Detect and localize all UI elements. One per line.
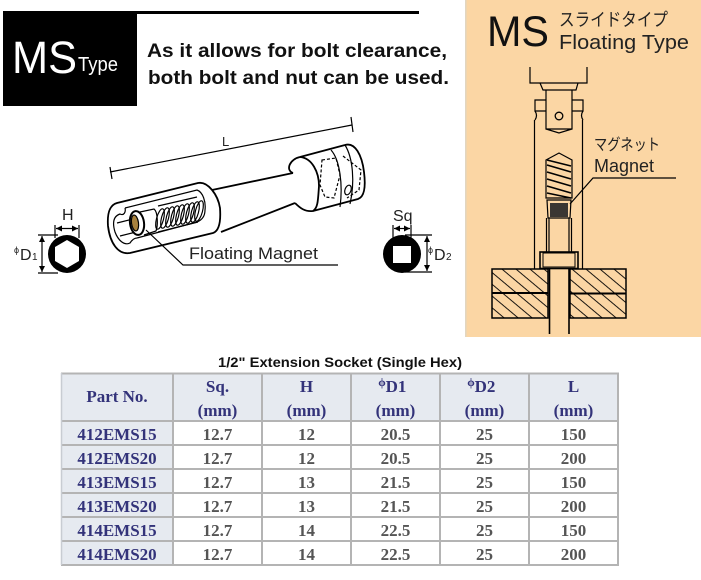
- table header row: H: [300, 377, 313, 396]
- specification table: [61, 373, 619, 565]
- diagram: hex end view with H and D1: ϕ: [14, 245, 19, 255]
- table header row: (mm): [465, 401, 504, 420]
- row 413EMS20: [77, 497, 586, 516]
- diagram: square end view with Sq and D2: D: [434, 247, 446, 264]
- row 412EMS20: 12.7: [203, 449, 233, 468]
- table header row: [86, 375, 593, 420]
- table header row: (mm): [287, 401, 326, 420]
- row 412EMS20: 412EMS20: [77, 449, 157, 468]
- diagram: socket with floating magnet: [108, 117, 365, 265]
- diagram: hex end view with H and D1: [14, 207, 86, 273]
- table title: 1/2" Extension Socket (Single Hex): [218, 354, 462, 370]
- row 414EMS15: 22.5: [381, 521, 410, 540]
- table header row: (mm): [376, 401, 415, 420]
- label: Floating Magnet: [146, 230, 338, 265]
- panel heading: [487, 8, 689, 56]
- table header row: (mm): [554, 401, 593, 420]
- row 412EMS15: 12.7: [203, 425, 233, 444]
- row 413EMS15: 12.7: [203, 473, 233, 492]
- description text: both bolt and nut can be used.: [148, 67, 449, 89]
- bolted plates: [492, 269, 626, 318]
- diagram: square end view with Sq and D2: 2: [446, 252, 452, 263]
- row 412EMS20: 25: [476, 449, 493, 468]
- diagram: hex end view with H and D1: 1: [32, 252, 38, 263]
- row 414EMS20: 414EMS20: [77, 545, 157, 564]
- magnet block: [547, 200, 571, 218]
- row 413EMS20: 13: [298, 497, 315, 516]
- floating magnet: [128, 209, 157, 236]
- description text: As it allows for bolt clearance,: [147, 40, 447, 62]
- row 414EMS20: 12.7: [203, 545, 233, 564]
- table header row: ϕ: [467, 375, 475, 389]
- row 413EMS15: 13: [298, 473, 315, 492]
- row 414EMS15: 14: [298, 521, 316, 540]
- row 414EMS15: 150: [561, 521, 586, 540]
- table header row: Part No.: [86, 387, 148, 406]
- row 413EMS20: 200: [561, 497, 586, 516]
- shaft: [212, 173, 295, 232]
- panel heading: Floating Type: [559, 32, 689, 54]
- row 414EMS15: 25: [476, 521, 493, 540]
- row 414EMS15: [77, 521, 586, 540]
- row 414EMS20: 14: [298, 545, 316, 564]
- spring: [154, 200, 205, 230]
- table header row: (mm): [198, 401, 237, 420]
- row 413EMS20: 413EMS20: [77, 497, 157, 516]
- drive and collar: [530, 67, 587, 269]
- row 413EMS15: [77, 473, 586, 492]
- panel heading: スライドタイプ: [559, 10, 668, 30]
- row 412EMS15: 20.5: [381, 425, 410, 444]
- table header row: D1: [386, 377, 406, 396]
- diagram: square end view with Sq and D2: Sq: [393, 208, 413, 225]
- table header row: L: [568, 377, 579, 396]
- row 414EMS20: 200: [561, 545, 586, 564]
- row 412EMS15: [77, 425, 586, 444]
- label: magnet: マグネット: [594, 136, 660, 154]
- row 413EMS20: 25: [476, 497, 493, 516]
- slotted sleeve: [108, 183, 220, 253]
- row 414EMS20: [77, 545, 586, 564]
- header banner: MS Type: Type: [78, 54, 118, 76]
- diagram: hex end view with H and D1: D: [20, 247, 32, 264]
- row 413EMS15: 150: [561, 473, 586, 492]
- row 412EMS15: 150: [561, 425, 586, 444]
- table header row: Sq.: [206, 377, 229, 396]
- row 413EMS20: 12.7: [203, 497, 233, 516]
- row 414EMS20: 25: [476, 545, 493, 564]
- header banner: MS Type: MS: [12, 32, 77, 83]
- row 413EMS20: 21.5: [381, 497, 410, 516]
- row 412EMS15: 12: [298, 425, 315, 444]
- panel heading: MS: [487, 8, 549, 56]
- diagram: square end view with Sq and D2: [383, 208, 452, 273]
- row 414EMS15: 414EMS15: [77, 521, 157, 540]
- row 413EMS15: 25: [476, 473, 493, 492]
- label: Floating Magnet: Floating Magnet: [189, 244, 318, 263]
- row 414EMS20: 22.5: [381, 545, 410, 564]
- row 413EMS15: 21.5: [381, 473, 410, 492]
- header banner: MS Type: [3, 11, 419, 106]
- row 412EMS15: 412EMS15: [77, 425, 157, 444]
- row 412EMS20: [77, 449, 586, 468]
- panel: MS floating type cross-section: [465, 0, 701, 337]
- row 412EMS20: 200: [561, 449, 586, 468]
- bolt and nut: [540, 218, 578, 334]
- socket head: [289, 145, 365, 211]
- description text: [147, 40, 449, 89]
- label: magnet: [570, 136, 676, 204]
- row 412EMS20: 12: [298, 449, 315, 468]
- spring: [546, 153, 572, 198]
- length dimension L: L: [222, 134, 229, 149]
- length dimension L: [110, 117, 353, 179]
- table header row: ϕ: [378, 375, 386, 389]
- row 414EMS15: 12.7: [203, 521, 233, 540]
- label: magnet: Magnet: [594, 156, 654, 176]
- row 412EMS15: 25: [476, 425, 493, 444]
- diagram: square end view with Sq and D2: ϕ: [428, 245, 433, 255]
- diagram: hex end view with H and D1: H: [62, 207, 74, 224]
- row 413EMS15: 413EMS15: [77, 473, 157, 492]
- row 412EMS20: 20.5: [381, 449, 410, 468]
- table header row: D2: [475, 377, 495, 396]
